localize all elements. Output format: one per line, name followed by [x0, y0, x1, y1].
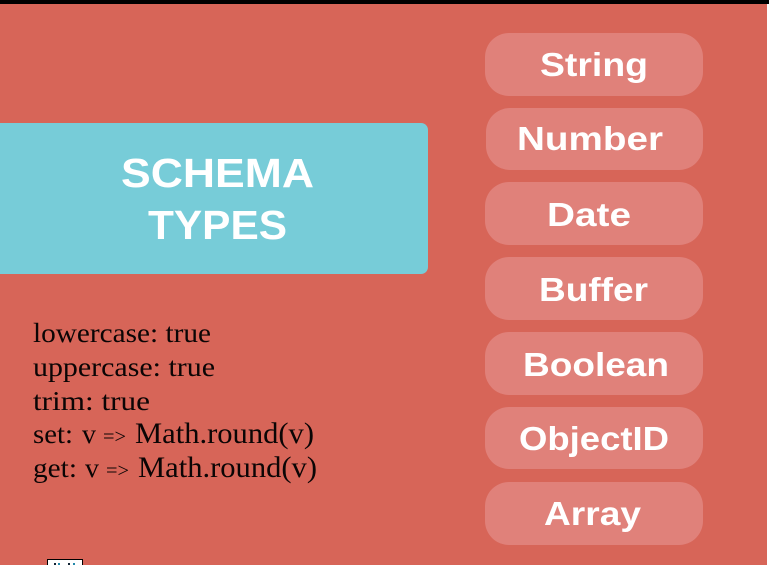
- text block: schema options: v: [82, 419, 97, 449]
- type pill: Boolean: [485, 332, 703, 395]
- text block: schema options: uppercase: true: [33, 352, 215, 382]
- type pill: ObjectID: [485, 407, 703, 469]
- text block: schema options: Math.round(v): [138, 451, 317, 484]
- type pill: String: String: [540, 46, 648, 83]
- text block: schema options: get:: [33, 453, 77, 483]
- top black bar: [0, 0, 769, 4]
- type pill: Boolean: Boolean: [523, 346, 669, 383]
- type pill: ObjectID: ObjectID: [519, 420, 669, 457]
- text block: schema options: lowercase: true: [33, 318, 211, 348]
- text block: schema options: v: [85, 453, 100, 483]
- type pill: Array: [485, 482, 703, 545]
- type pill: Buffer: [485, 257, 703, 320]
- type pill: Array: Array: [544, 495, 642, 532]
- type pill: Buffer: Buffer: [539, 271, 648, 308]
- heading: schema types: SCHEMA: [121, 150, 314, 196]
- text block: schema options: set:: [33, 419, 73, 449]
- type pill: Date: [485, 182, 703, 245]
- text block: schema options: =>: [106, 460, 129, 482]
- heading: schema types: [121, 150, 314, 248]
- text block: schema options: trim: true: [33, 386, 150, 416]
- type pill: String: [485, 33, 703, 96]
- panel: schema types banner: [0, 123, 428, 274]
- icon: clipped thumbnail: [48, 560, 82, 565]
- heading: schema types: TYPES: [148, 202, 287, 248]
- type pill: Number: [486, 108, 703, 170]
- text block: schema options: =>: [103, 426, 126, 448]
- text block: schema options: Math.round(v): [135, 417, 314, 450]
- text block: schema options: [33, 318, 317, 484]
- type pill: Number: Number: [517, 120, 663, 157]
- type pill: Date: Date: [547, 196, 631, 233]
